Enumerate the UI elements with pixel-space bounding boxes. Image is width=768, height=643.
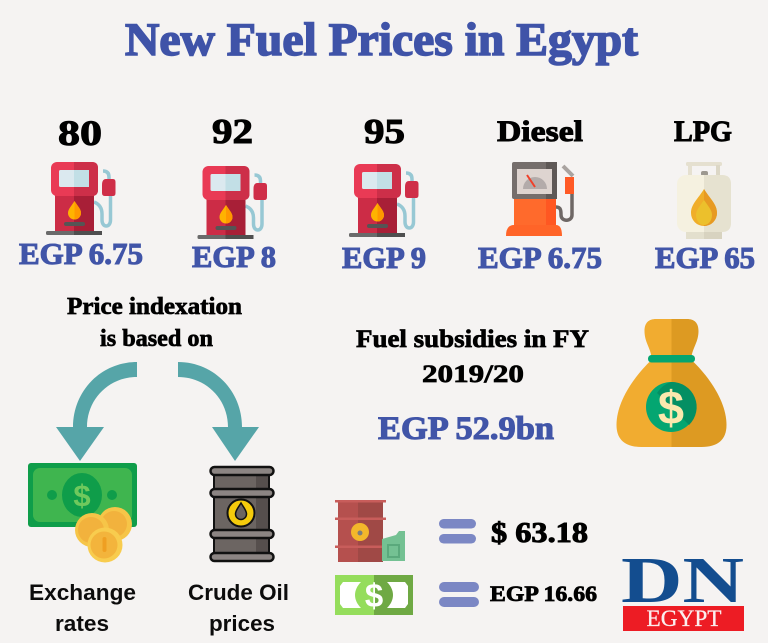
- icon: red fuel pump 95: [349, 164, 418, 237]
- heading: LPG: LPG: [674, 115, 732, 148]
- heading: diesel: Diesel: [497, 115, 583, 148]
- icon: equals sign for cash: [439, 582, 479, 607]
- panel: diesel: [478, 115, 602, 275]
- arrow: to crude oil prices: [178, 362, 259, 461]
- heading: fuel subsidies: 2019/20: [422, 361, 524, 388]
- icon: equals sign for barrel: [439, 519, 476, 544]
- panel: fuel 92: [192, 112, 276, 274]
- panel: fuel 95: [342, 112, 426, 275]
- label: exchange rates: [29, 580, 136, 636]
- heading: price indexation: [67, 294, 242, 352]
- logo: DN Egypt: EGYPT: [646, 606, 722, 631]
- heading: fuel subsidies: Fuel subsidies in FY: [356, 326, 589, 353]
- price: 95: EGP 9: [342, 240, 426, 275]
- price: 80: EGP 6.75: [19, 236, 143, 271]
- icon: oil barrel: [210, 467, 274, 561]
- logo: DN Egypt: DN: [621, 544, 744, 617]
- icon: red barrel with green can: [335, 500, 405, 562]
- label: exchange rates: rates: [55, 611, 109, 636]
- heading: 80: 80: [58, 113, 102, 153]
- label: crude oil prices: [188, 580, 289, 636]
- panel: LPG: [655, 115, 755, 275]
- logo: DN Egypt: [621, 544, 744, 631]
- price: 92: EGP 8: [192, 239, 276, 274]
- price: diesel: EGP 6.75: [478, 240, 602, 275]
- icon: LPG cylinder: [677, 162, 731, 239]
- panel: fuel 80: [19, 113, 143, 271]
- heading: price indexation: Price indexation: [67, 294, 242, 320]
- icon: banknote and coins: [28, 463, 137, 562]
- heading: 95: 95: [364, 112, 405, 151]
- subsidies value: EGP 52.9bn: [378, 411, 554, 447]
- value: cash price: EGP 16.66: [490, 581, 597, 606]
- heading: fuel subsidies: [356, 326, 589, 388]
- label: crude oil prices: prices: [209, 611, 275, 636]
- icon: money bag: [616, 319, 726, 447]
- label: exchange rates: Exchange: [29, 580, 136, 605]
- icon: banknote and coins: $: [73, 478, 91, 513]
- price: LPG: EGP 65: [655, 240, 755, 275]
- icon: green cash: $: [365, 577, 383, 614]
- icon: money bag: $: [658, 381, 684, 434]
- heading: 92: 92: [212, 112, 253, 151]
- value: oil price: $ 63.18: [491, 517, 588, 549]
- title: New Fuel Prices in Egypt: [125, 14, 638, 66]
- heading: price indexation: is based on: [100, 326, 213, 352]
- icon: red fuel pump 80: [46, 162, 116, 235]
- icon: green cash: [335, 575, 413, 615]
- icon: red fuel pump 92: [198, 166, 267, 239]
- label: crude oil prices: Crude Oil: [188, 580, 289, 605]
- arrow: to exchange rates: [56, 362, 137, 461]
- icon: diesel pump: [506, 162, 574, 236]
